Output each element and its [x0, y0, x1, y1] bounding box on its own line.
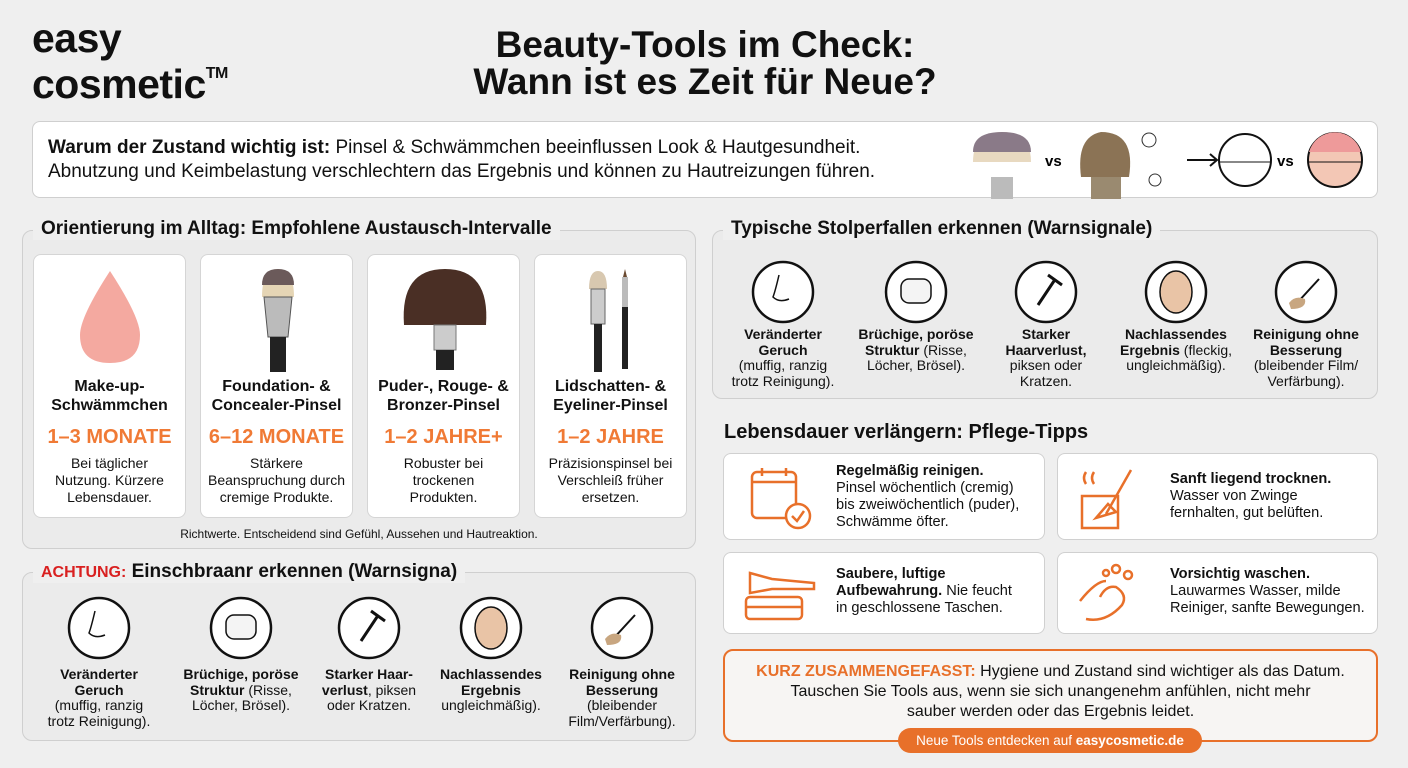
summary text: KURZ ZUSAMMENGEFASST: Hygiene und Zustand sind wichtiger als das Datum. [756, 663, 1345, 680]
intro text: Warum der Zustand wichtig ist: Pinsel & Schwämmchen beeinflussen Look & Hautgesundheit. [48, 137, 860, 158]
card: sponge: Lebensdauer. [67, 489, 152, 505]
icon: brush drying [1080, 469, 1132, 530]
panel: Warnsignale left: ungleichmäßig). [441, 697, 541, 713]
tip: aufbewahrung: in geschlossene Taschen. [836, 600, 1003, 616]
card: powder brush: Robuster bei [404, 455, 483, 471]
panel: Warnsignale left: oder Kratzen. [327, 697, 411, 713]
tip: aufbewahrung: Saubere, luftige [836, 566, 945, 582]
card: foundation brush: Stärkere [250, 455, 303, 471]
panel: Warnsignale right: Reinigung ohne [1253, 326, 1359, 342]
warning texts [732, 326, 834, 389]
panel: Warnsignale right: piksen oder [1010, 357, 1082, 373]
tip: trocknen: Wasser von Zwinge [1170, 488, 1298, 504]
warning texts [48, 666, 150, 729]
panel: Warnsignale right: Verfärbung). [1267, 372, 1345, 388]
intro box [32, 121, 1378, 198]
panel: Warnsignale right: Ergebnis (fleckig, [1120, 342, 1232, 358]
card: eyeshadow brushes: ersetzen. [582, 489, 639, 505]
panel: Warnsignale left: Brüchige, poröse [183, 666, 299, 682]
tip: trocknen [1057, 453, 1378, 540]
panel: Warnsignale right: Brüchige, poröse [858, 326, 974, 342]
heading: Pflege-Tipps: Lebensdauer verlängern: Pflege-Tipps [724, 421, 1088, 443]
warning texts: Geruch [74, 682, 124, 698]
panel: Warnsignale right: Starker [1022, 326, 1070, 342]
panel: Warnsignale right: ungleichmäßig). [1126, 357, 1226, 373]
panel: Warnsignale left: Besserung [586, 682, 658, 698]
card: foundation brush: Foundation- & [222, 378, 331, 395]
warning texts: Veränderter [60, 666, 138, 682]
tip: trocknen: fernhalten, gut belüften. [1170, 505, 1323, 521]
panel: Warnsignale left: Ergebnis [461, 682, 521, 698]
button: Neue Tools entdecken auf easycosmetic.de [916, 733, 1184, 748]
icons row [68, 596, 654, 660]
card: sponge [33, 254, 186, 518]
panel: Austausch-Intervalle [22, 230, 696, 549]
button [898, 728, 1202, 753]
card: sponge: Nutzung. Kürzere [55, 472, 164, 488]
warning texts: Geruch [758, 342, 808, 358]
summary text [756, 663, 1345, 720]
heading: ACHTUNG: Einschbraanr erkennen (Warnsigna) [41, 561, 457, 582]
panel: Warnsignale left: Löcher, Brösel). [192, 697, 290, 713]
tip: aufbewahrung [723, 552, 1045, 634]
heading: Typische Stolperfallen erkennen (Warnsignale) [731, 218, 1152, 239]
card: foundation brush: 6–12 MONATE [209, 426, 344, 448]
warning texts: (muffig, ranzig [739, 357, 827, 373]
card: powder brush: Produkten. [410, 489, 477, 505]
card: foundation brush: Concealer-Pinsel [212, 397, 341, 414]
heading: Orientierung im Alltag: Empfohlene Austausch-Intervalle [41, 218, 552, 239]
card: powder brush: Bronzer-Pinsel [387, 397, 500, 414]
panel: Warnsignale right: Kratzen. [1020, 372, 1072, 388]
logo: easy [32, 15, 121, 61]
card: foundation brush: Beanspruchung durch [208, 472, 345, 488]
card: foundation brush [200, 254, 353, 518]
panel: Warnsignale right: Löcher, Brösel). [867, 357, 965, 373]
summary text: sauber werden oder das Ergebnis leidet. [907, 703, 1194, 720]
tip: reinigen: Regelmäßig reinigen. [836, 463, 984, 479]
footnote: Richtwerte. Entscheidend sind Gefühl, Aussehen und Hautreaktion. [180, 527, 538, 541]
tip: reinigen: bis zweiwöchentlich (puder), [836, 497, 1019, 513]
card: powder brush: 1–2 JAHRE+ [384, 426, 503, 448]
panel: Warnsignale right: Struktur (Risse, [865, 342, 967, 358]
card: eyeshadow brushes: Eyeliner-Pinsel [553, 397, 668, 414]
icon: calendar [750, 468, 812, 530]
tip: waschen: Lauwarmes Wasser, milde [1170, 583, 1341, 599]
intro icons: clean vs dirty brush, skin: vs [1045, 153, 1062, 170]
intro icons: clean vs dirty brush, skin [973, 132, 1363, 199]
panel: Warnsignale right: Haarverlust, [1006, 342, 1086, 358]
intro text: Abnutzung und Keimbelastung verschlechtern das Ergebnis und können zu Hautreizungen führen. [48, 161, 875, 182]
tip: trocknen: Sanft liegend trocknen. [1170, 471, 1331, 487]
card: sponge: 1–3 MONATE [47, 426, 172, 448]
tip: reinigen [723, 453, 1045, 540]
summary text: Tauschen Sie Tools aus, wenn sie sich unangenehm anfühlen, nicht mehr [790, 683, 1311, 700]
card: eyeshadow brushes [534, 254, 687, 518]
tip: waschen [1057, 552, 1378, 634]
panel: Warnsignale left: Reinigung ohne [569, 666, 675, 682]
panel: Warnsignale left: (bleibender [587, 697, 657, 713]
card: powder brush: trockenen [413, 472, 474, 488]
intro icons: clean vs dirty brush, skin: vs [1277, 153, 1294, 170]
title: Beauty-Tools im Check: [496, 24, 914, 65]
panel: Warnsignale left: Starker Haar- [325, 666, 413, 682]
card: eyeshadow brushes: 1–2 JAHRE [557, 426, 664, 448]
icon: hands washing [1079, 564, 1134, 621]
panel: Warnsignale left [22, 572, 696, 741]
icons row [752, 260, 1338, 324]
warning texts: trotz Reinigung). [48, 712, 150, 728]
warning texts: trotz Reinigung). [732, 372, 834, 388]
tip: aufbewahrung: Aufbewahrung. Nie feucht [836, 583, 1012, 599]
intro text [48, 137, 875, 182]
panel: Warnsignale right: Besserung [1270, 342, 1342, 358]
card: foundation brush: cremige Produkte. [220, 489, 333, 505]
card: eyeshadow brushes: Verschleiß früher [558, 472, 663, 488]
warning texts: (muffig, ranzig [55, 697, 143, 713]
card: sponge: Bei täglicher [71, 455, 148, 471]
title: Wann ist es Zeit für Neue? [473, 61, 937, 102]
card: eyeshadow brushes: Lidschatten- & [555, 378, 666, 395]
card: sponge: Make-up- [74, 378, 145, 395]
panel: Warnsignale right: Nachlassendes [1125, 326, 1227, 342]
card: powder brush: Puder-, Rouge- & [378, 378, 509, 395]
tip: waschen: Reiniger, sanfte Bewegungen. [1170, 600, 1365, 616]
logo [32, 15, 228, 107]
card: sponge: Schwämmchen [51, 397, 168, 414]
tip: reinigen: Pinsel wöchentlich (cremig) [836, 480, 1014, 496]
panel: Warnsignale left: Nachlassendes [440, 666, 542, 682]
title [473, 24, 937, 102]
logo: cosmeticTM [32, 61, 228, 107]
tip: reinigen: Schwämme öfter. [836, 514, 949, 530]
warning texts: Veränderter [744, 326, 822, 342]
panel: Warnsignale left: verlust, piksen [322, 682, 416, 698]
panel: Warnsignale right: (bleibender Film/ [1254, 357, 1358, 373]
tip: waschen: Vorsichtig waschen. [1170, 566, 1310, 582]
card: eyeshadow brushes: Präzisionspinsel bei [549, 455, 672, 471]
panel: Warnsignale left: Struktur (Risse, [190, 682, 292, 698]
card: powder brush [367, 254, 520, 518]
panel: Warnsignale left: Film/Verfärbung). [568, 712, 676, 728]
icon: brush on box [744, 571, 816, 620]
summary box [723, 649, 1378, 742]
panel: Warnsignale right [712, 230, 1378, 399]
